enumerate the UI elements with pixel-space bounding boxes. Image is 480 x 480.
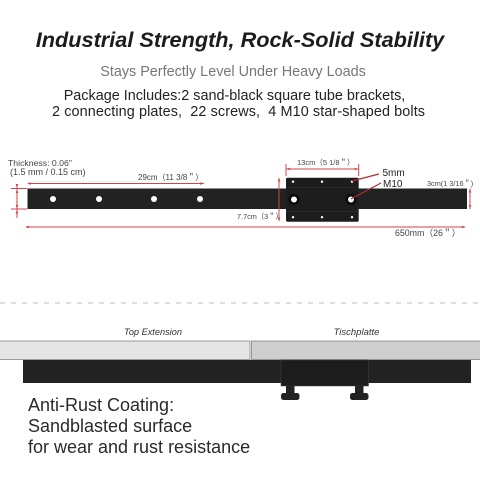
side view of table assembly [0,327,480,400]
label: top extension: Top Extension [124,327,182,337]
anti-rust coating text [28,395,250,457]
title: Industrial Strength, Rock-Solid Stability [36,27,445,52]
dimension labels: 5mm [382,168,405,179]
package contents text: 2 connecting plates, 22 screws, 4 M10 star-shaped bolts [52,104,425,120]
dimension labels: Thickness: 0.06" [8,158,72,168]
left knob [281,386,300,400]
dimension labels: 3cm(1 3/16＂) [427,179,473,188]
label: tischplatte: Tischplatte [334,327,379,338]
right knob [350,386,368,400]
anti-rust coating text: Anti-Rust Coating: [28,395,174,415]
dimension labels: 650mm（26＂） [395,228,461,238]
dimension labels: 13cm（5 1/8＂） [297,158,355,167]
black bracket [23,360,471,383]
dimension labels [8,158,473,238]
bracket bar [28,188,467,209]
dimension diagram [8,158,473,238]
anti-rust coating text: Sandblasted surface [28,416,192,436]
table top extension slab [0,341,250,360]
dimension labels: M10 [383,179,403,190]
package contents text [52,88,425,120]
tischplatte slab [252,341,480,360]
red dimension lines [11,164,471,228]
subtitle: Stays Perfectly Level Under Heavy Loads [100,64,366,80]
dimension labels: (1.5 mm / 0.15 cm) [10,167,86,177]
connecting plate [286,178,359,222]
anti-rust coating text: for wear and rust resistance [28,437,250,457]
dashed divider [0,302,480,304]
package contents text: Package Includes:2 sand-black square tube brackets, [64,88,405,104]
clamp plate [281,360,368,386]
dimension labels: 29cm（11 3/8＂） [138,173,203,182]
dimension labels: 7.7cm（3＂） [237,212,283,221]
